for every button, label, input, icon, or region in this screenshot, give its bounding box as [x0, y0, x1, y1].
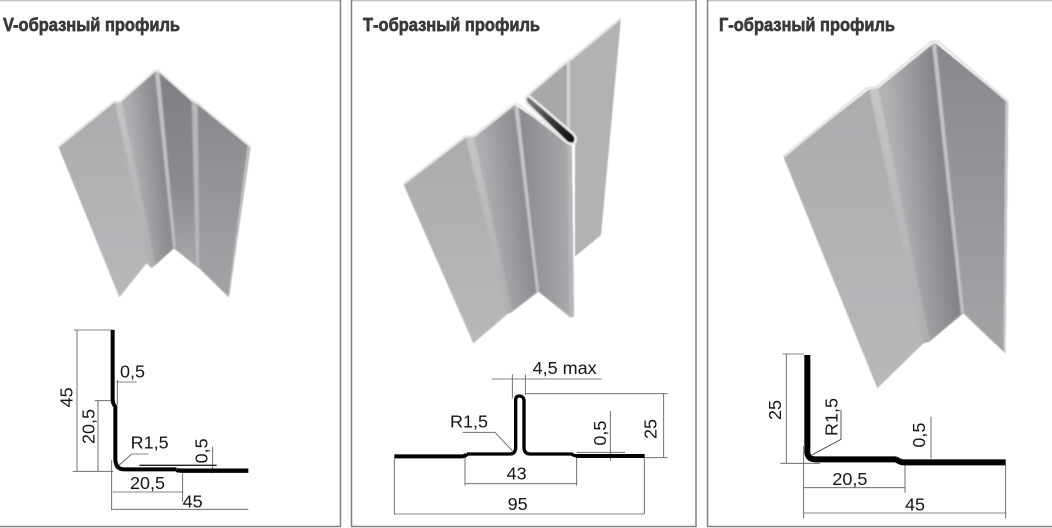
technical drawing: L-shaped profile section [765, 354, 1006, 518]
technical drawing: V-shaped profile section: R1,5 [131, 432, 169, 452]
technical drawing: L-shaped profile section: 25 [765, 400, 785, 420]
panel: V-shaped profile [0, 0, 340, 526]
technical drawing: V-shaped profile section: 0,5 [120, 362, 145, 382]
technical drawing: T-shaped profile section [394, 358, 668, 514]
technical drawing: V-shaped profile section: 20,5 [79, 409, 99, 444]
technical drawing: L-shaped profile section: 45 [905, 495, 925, 515]
technical drawing: V-shaped profile section: 20,5 [130, 473, 165, 493]
heading: V-shaped profile: V-образный профиль [3, 15, 180, 35]
panel: L-shaped profile [708, 0, 1052, 526]
technical drawing: V-shaped profile section [57, 330, 248, 511]
technical drawing: L-shaped profile section: R1,5 [821, 398, 841, 436]
technical drawing: T-shaped profile section: 4,5 max [533, 358, 597, 378]
technical drawing: T-shaped profile section: 95 [508, 494, 528, 514]
panel: T-shaped profile [352, 0, 696, 526]
heading: L-shaped profile: Г-образный профиль [719, 15, 895, 35]
illustration: V-shaped profile [58, 70, 251, 298]
technical drawing: T-shaped profile section: 43 [507, 463, 527, 483]
technical drawing: T-shaped profile section: R1,5 [450, 411, 488, 431]
illustration: L-shaped profile [782, 40, 1009, 388]
technical drawing: V-shaped profile section: 45 [57, 387, 77, 407]
technical drawing: T-shaped profile section: 0,5 [590, 421, 610, 446]
technical drawing: V-shaped profile section: 0,5 [191, 438, 211, 463]
technical drawing: T-shaped profile section: 25 [641, 419, 661, 439]
technical drawing: L-shaped profile section: 20,5 [832, 469, 867, 489]
technical drawing: V-shaped profile section: 45 [183, 491, 203, 511]
technical drawing: L-shaped profile section: 0,5 [909, 423, 929, 448]
heading: T-shaped profile: Т-образный профиль [363, 15, 540, 35]
illustration: T-shaped profile [390, 18, 621, 350]
